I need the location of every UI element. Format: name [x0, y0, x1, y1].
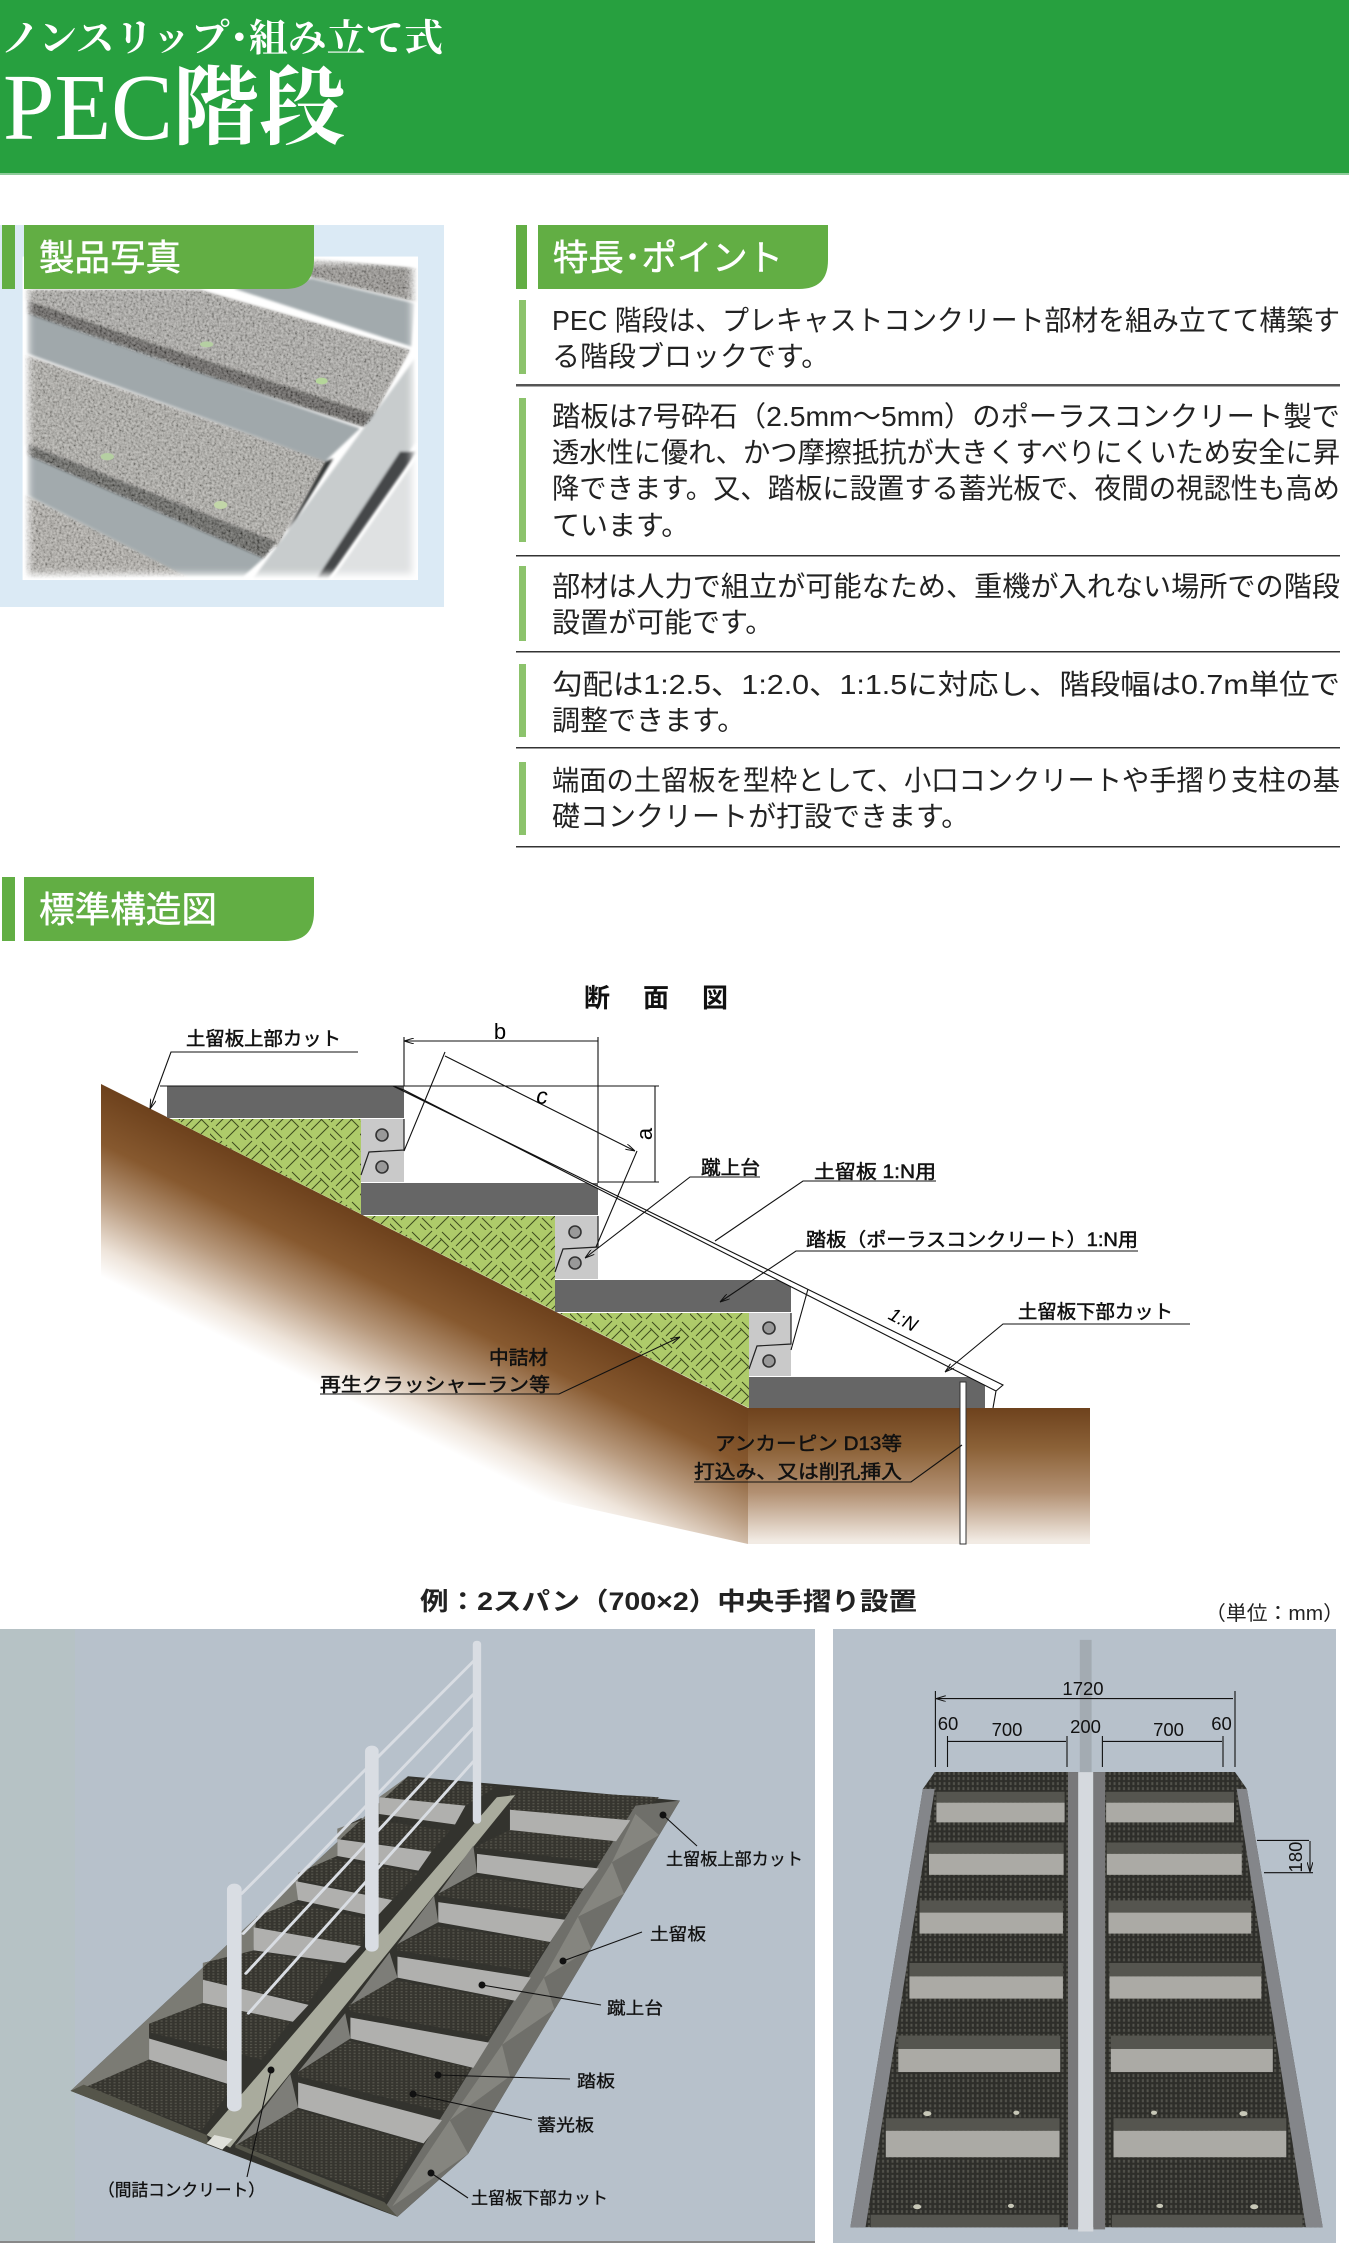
photo of stairs [23, 257, 418, 580]
subtitle: ノンスリップ･組み立て式 [1, 18, 443, 60]
title: 階段 [173, 60, 345, 156]
dimension lines [160, 1019, 996, 1408]
centre strip [207, 1795, 515, 2148]
label: infill concrete: （間詰コンクリート） [98, 2181, 265, 2200]
tread texture [86, 1778, 659, 2198]
label: tread [434, 2072, 615, 2091]
handrail [234, 1644, 477, 2106]
label: porous tread: 踏板（ポーラスコンクリート）1:N用 [806, 1229, 1138, 1251]
text block: point 3 [519, 566, 1340, 641]
dimension labels: 60 [938, 1713, 958, 1734]
label: bottom cut: 土留板下部カット [1018, 1301, 1173, 1323]
text block: point 2: 降できます。又、踏板に設置する蓄光板で、夜間の視認性も高め [552, 473, 1340, 504]
label: retaining board: 土留板 1:N用 [814, 1161, 936, 1183]
text block: point 4: 勾配は1:2.5、1:2.0、1:1.5に対応し、階段幅は0.7m単位で [552, 669, 1340, 700]
chart: cross-section diagram [101, 1019, 1190, 1544]
text block: point 1 [519, 300, 1340, 374]
heading tag: standard structure [2, 877, 314, 941]
nosing bars [871, 1792, 1302, 2227]
slope rail [393, 1086, 1003, 1391]
label: riser base: 蹴上台 [701, 1157, 760, 1179]
text block: point 5: 端面の土留板を型枠として、小口コンクリートや手摺り支柱の基 [552, 765, 1340, 796]
title [3, 56, 345, 160]
text block: point 1: PEC 階段は、プレキャストコンクリート部材を組み立てて構築す [552, 305, 1340, 336]
label: riser base: 蹴上台 [607, 1999, 663, 2018]
label: anchor pin [694, 1433, 962, 1483]
label: bottom cut: 土留板下部カット [471, 2189, 608, 2208]
dimension labels [938, 1678, 1306, 1872]
text block: point 1: る階段ブロックです。 [552, 341, 829, 372]
label: infill: 再生クラッシャーラン等 [320, 1374, 550, 1396]
label: top cut: 土留板上部カット [666, 1850, 803, 1869]
side skirts [71, 1776, 408, 2091]
label: anchor pin: 打込み、又は削孔挿入 [694, 1461, 902, 1483]
dimension labels: 60 [1211, 1713, 1232, 1734]
earth slope [101, 1084, 1090, 1544]
stair model front [850, 1640, 1323, 2231]
cross-section title: 断 面 図 [584, 983, 728, 1013]
label: infill [320, 1337, 680, 1396]
risers with bolts [361, 1119, 791, 1376]
dimension labels: 700 [1153, 1719, 1184, 1740]
label: tread: 踏板 [577, 2072, 615, 2091]
dimension lines: a [632, 1127, 657, 1140]
anchor pin [960, 1382, 966, 1544]
text block: point 3: 設置が可能です。 [552, 607, 773, 638]
dimension labels: 700 [992, 1719, 1022, 1740]
label: riser base [585, 1157, 760, 1258]
heading tag: features: 特長･ポイント [553, 237, 783, 278]
label: retaining board [715, 1161, 936, 1241]
label: retaining board [560, 1925, 706, 1964]
heading tag: product photo: 製品写真 [39, 237, 181, 278]
text block: point 4 [519, 664, 1340, 737]
panel: perspective render [0, 1629, 815, 2243]
heading tag: product photo [2, 225, 314, 289]
text block: point 3: 部材は人力で組立が可能なため、重機が入れない場所での階段 [552, 571, 1340, 602]
label: top cut [150, 1028, 358, 1109]
luminous dots [913, 2111, 1258, 2209]
text block: point 2: 透水性に優れ、かつ摩擦抵抗が大きくすべりにくいため安全に昇 [552, 437, 1340, 468]
crushed fill [171, 1119, 749, 1408]
panel: product photo [0, 225, 444, 607]
text block: point 5: 礎コンクリートが打設できます。 [552, 801, 969, 832]
label: porous tread [720, 1229, 1138, 1302]
dimension lines: b [494, 1019, 506, 1044]
risers [886, 1803, 1286, 2157]
dimension labels: 1720 [1062, 1678, 1104, 1699]
stair model [71, 1644, 680, 2217]
dimension labels: 200 [1070, 1716, 1101, 1737]
label: top cut [660, 1812, 803, 1869]
label: retaining board: 土留板 [650, 1925, 706, 1944]
treads [167, 1086, 985, 1408]
dimension lines: c [536, 1083, 548, 1109]
text block: point 2 [519, 398, 1340, 542]
text block: point 2: ています。 [552, 510, 689, 541]
text block: point 5 [519, 762, 1340, 835]
dimension labels: 180 [1285, 1842, 1306, 1872]
text block: point 2: 踏板は7号砕石（2.5mm～5mm）のポーラスコンクリート製で [552, 401, 1340, 432]
label: luminous plate: 蓄光板 [537, 2116, 594, 2135]
example heading: 例：2スパン（700×2）中央手摺り設置 [420, 1588, 917, 1616]
label: riser base [478, 1982, 663, 2018]
heading tag: standard structure: 標準構造図 [39, 889, 217, 930]
dimension lines [935, 1691, 1313, 1873]
heading tag: features [516, 225, 828, 289]
panel: front view render [833, 1629, 1336, 2243]
label: infill: 中詰材 [489, 1347, 548, 1369]
label: bottom cut [945, 1301, 1190, 1372]
label: infill concrete [98, 2066, 274, 2200]
title: PEC [3, 56, 173, 160]
text block: point 4: 調整できます。 [552, 705, 745, 736]
label: top cut: 土留板上部カット [186, 1028, 341, 1050]
label: anchor pin: アンカーピン D13等 [715, 1433, 902, 1455]
header banner [0, 0, 1349, 175]
front edges [71, 2085, 397, 2217]
label: luminous plate [410, 2090, 594, 2135]
label: bottom cut [428, 2170, 608, 2208]
dimension lines: 1:N [885, 1304, 921, 1337]
risers [149, 1797, 630, 2143]
unit note: （単位：mm） [1205, 1602, 1344, 1625]
